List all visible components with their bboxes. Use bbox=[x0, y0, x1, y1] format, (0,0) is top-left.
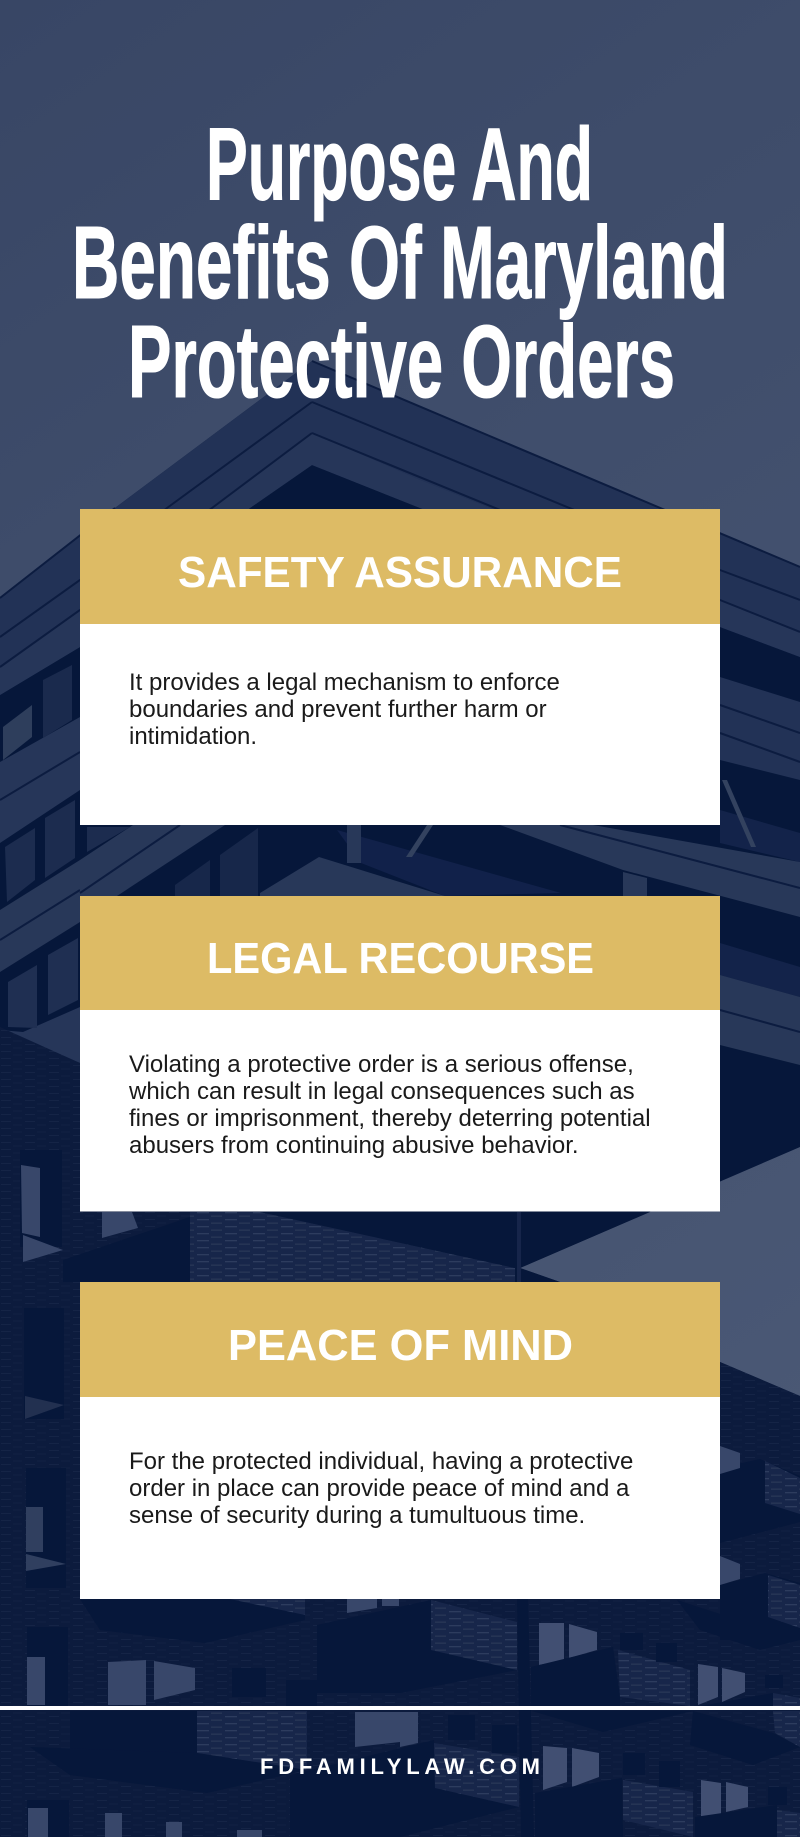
upper concrete roof bands bbox=[0, 361, 800, 695]
body text: safety assurance: boundaries and prevent further harm or bbox=[129, 696, 547, 723]
body text: legal recourse: abusers from continuing abusive behavior. bbox=[129, 1132, 579, 1159]
lower balconies and windows, left of pole bbox=[30, 1599, 519, 1837]
footer divider line bbox=[0, 1706, 800, 1710]
heading band: peace of mind bbox=[80, 1282, 720, 1397]
heading band: legal recourse bbox=[80, 896, 720, 1010]
left concrete floors and windows bbox=[0, 665, 80, 1063]
body text: safety assurance: intimidation. bbox=[129, 723, 257, 750]
heading band: peace of mind: PEACE OF MIND bbox=[228, 1321, 573, 1370]
body text: peace of mind: For the protected individual, having a protective bbox=[129, 1448, 633, 1475]
body text: peace of mind: sense of security during a tumultuous time. bbox=[129, 1502, 585, 1529]
panel: peace of mind bbox=[80, 1282, 720, 1599]
title bbox=[72, 106, 728, 419]
body text: legal recourse: Violating a protective order is a serious offense, bbox=[129, 1051, 634, 1078]
body text: legal recourse: fines or imprisonment, thereby deterring potential bbox=[129, 1105, 651, 1132]
panel: legal recourse bbox=[80, 896, 720, 1212]
right concrete floors and glass bbox=[500, 677, 800, 1065]
heading band: legal recourse: LEGAL RECOURSE bbox=[207, 934, 594, 983]
heading band: safety assurance: SAFETY ASSURANCE bbox=[178, 548, 622, 597]
left column windows bbox=[20, 1150, 69, 1837]
body text: legal recourse: which can result in legal consequences such as bbox=[128, 1078, 635, 1105]
lower balconies and windows, right of pole bbox=[531, 1446, 800, 1837]
central concrete between first and second cards bbox=[80, 825, 561, 896]
vertical pole bbox=[517, 1599, 534, 1837]
balcony between second and third cards bbox=[63, 1212, 650, 1282]
panel: safety assurance bbox=[80, 509, 720, 825]
body text: peace of mind: order in place can provide peace of mind and a bbox=[129, 1475, 630, 1502]
body text: safety assurance: It provides a legal mechanism to enforce bbox=[129, 669, 560, 696]
lower brick building bbox=[0, 1027, 800, 1837]
footer: website: FDFAMILYLAW.COM bbox=[260, 1754, 540, 1779]
heading band: safety assurance bbox=[80, 509, 720, 624]
